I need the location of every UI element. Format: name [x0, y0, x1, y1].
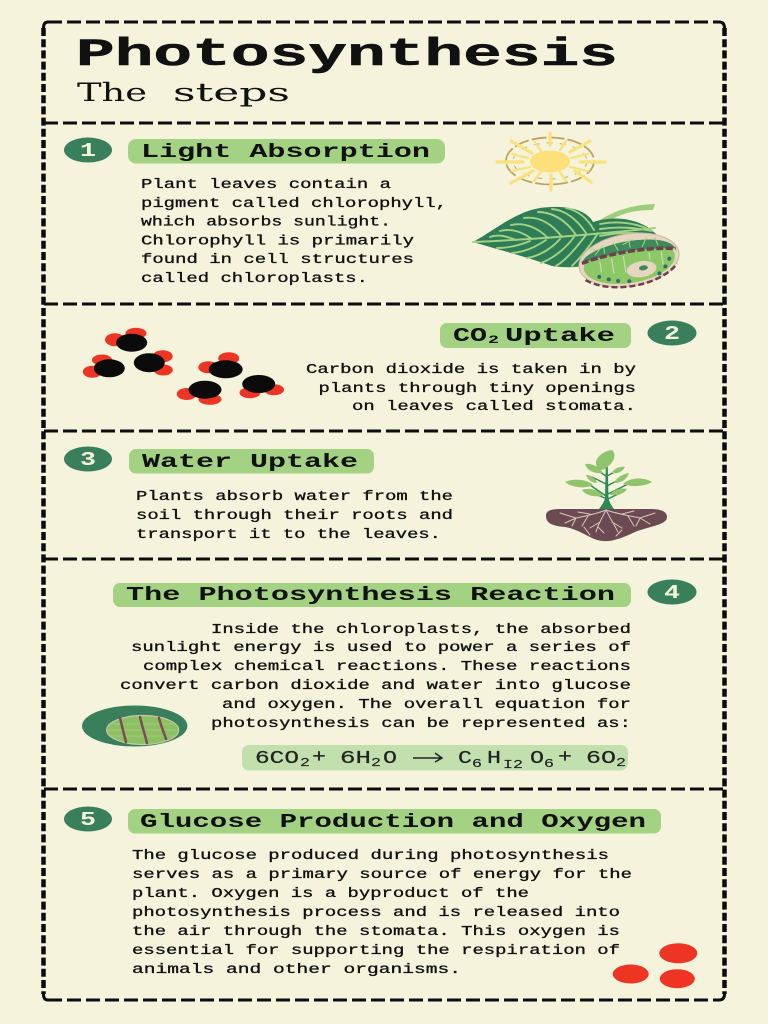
heading: glucose production and oxygen: Glucose Production and Oxygen	[140, 811, 646, 833]
text block: reaction: photosynthesis can be represented as:	[211, 717, 631, 732]
text block: light absorption: called chloroplasts.	[141, 272, 368, 287]
text block: CO2 uptake	[306, 363, 636, 415]
text block: light absorption: Chlorophyll is primarily	[141, 234, 414, 250]
step number 1: 1	[80, 140, 96, 162]
equation: 6O	[586, 749, 616, 769]
panel: step 5 glucose and oxygen	[64, 806, 697, 988]
text block: reaction: sunlight energy is used to power a series of	[131, 641, 631, 656]
text block: glucose: photosynthesis process and is released into	[132, 906, 620, 921]
text block: reaction: convert carbon dioxide and water into glucose	[120, 679, 631, 694]
icon: oxygen molecules	[613, 943, 697, 988]
equation: H	[487, 749, 501, 769]
equation	[242, 745, 628, 772]
text block: glucose: essential for supporting the respiration of	[132, 944, 620, 959]
text block: reaction: and oxygen. The overall equation for	[222, 698, 631, 713]
cross-section	[575, 226, 683, 294]
equation: O	[383, 749, 397, 769]
equation: C	[458, 749, 472, 769]
text block: glucose: the air through the stomata. This oxygen is	[132, 925, 620, 940]
equation: 6	[544, 757, 554, 771]
subtitle	[77, 78, 290, 107]
step number 3	[64, 446, 112, 472]
step number 1	[64, 138, 112, 162]
panel: step 4 reaction	[82, 580, 696, 772]
step number 5: 5	[80, 809, 96, 831]
step number 4: 4	[664, 582, 680, 604]
subtitle: steps	[173, 78, 290, 107]
text block: reaction: Inside the chloroplasts, the absorbed	[211, 623, 631, 638]
heading: CO2 uptake: 2	[488, 335, 499, 347]
equation: 2	[616, 756, 626, 770]
equation: 6H	[340, 749, 371, 769]
panel: step 3 water uptake	[64, 446, 667, 543]
text block: glucose: The glucose produced during photosynthesis	[132, 849, 609, 864]
step number 2	[648, 320, 696, 346]
text block: light absorption	[141, 178, 447, 287]
equation: 2	[300, 756, 310, 770]
text block: glucose: serves as a primary source of energy for the	[132, 868, 632, 883]
heading: light absorption	[128, 139, 445, 164]
equation: +	[558, 748, 572, 768]
heading: CO2 uptake: CO	[453, 325, 487, 347]
icon: leaf with cross-section	[473, 204, 683, 294]
text block: glucose: plant. Oxygen is a byproduct of the	[132, 887, 529, 902]
panel: step 1 light absorption	[64, 133, 683, 294]
text block: light absorption: which absorbs sunlight.	[141, 216, 391, 230]
equation: I2	[503, 758, 523, 772]
step number 5	[64, 806, 112, 832]
step number 4	[648, 580, 696, 604]
equation: 6CO	[255, 749, 299, 769]
text block: water uptake: Plants absorb water from the	[136, 490, 453, 505]
heading: CO2 uptake: Uptake	[505, 325, 615, 347]
heading: glucose production and oxygen	[128, 809, 661, 834]
subtitle: The	[77, 78, 147, 107]
text block: light absorption: found in cell structures	[141, 253, 414, 268]
text block: reaction	[120, 623, 631, 732]
text block: CO2 uptake: on leaves called stomata.	[352, 400, 636, 415]
text block: glucose	[132, 849, 632, 978]
text block: light absorption: pigment called chlorophyll,	[141, 197, 447, 212]
text block: water uptake: soil through their roots and	[136, 509, 453, 524]
text block: CO2 uptake: Carbon dioxide is taken in by	[306, 363, 636, 378]
heading: light absorption: Light Absorption	[141, 141, 430, 163]
step number 2: 2	[664, 323, 680, 345]
heading: CO2 uptake	[440, 323, 631, 348]
icon: sun	[497, 133, 605, 190]
icon: plant with roots	[546, 450, 667, 541]
equation: +	[312, 748, 326, 768]
heading: the photosynthesis reaction	[113, 583, 631, 607]
title: Photosynthesis	[76, 33, 618, 77]
step number 3: 3	[80, 449, 96, 471]
arrow	[413, 753, 442, 762]
text block: reaction: complex chemical reactions. These reactions	[143, 660, 631, 675]
title	[76, 33, 618, 107]
heading: water uptake: Water Uptake	[142, 451, 358, 473]
equation: 2	[371, 756, 381, 770]
icon: CO2 molecules	[83, 328, 284, 405]
heading: the photosynthesis reaction: The Photosynthesis Reaction	[126, 584, 615, 606]
text block: glucose: animals and other organisms.	[132, 963, 461, 978]
panel: step 2 CO2 uptake	[83, 320, 697, 415]
text block: water uptake: transport it to the leaves.	[136, 528, 441, 543]
heading: water uptake	[129, 449, 374, 474]
equation: 6	[472, 757, 482, 771]
text block: light absorption: Plant leaves contain a	[141, 178, 391, 193]
text block: water uptake	[136, 490, 453, 543]
equation: O	[530, 749, 544, 769]
icon: chloroplast	[82, 706, 187, 746]
text block: CO2 uptake: plants through tiny openings	[318, 382, 636, 397]
